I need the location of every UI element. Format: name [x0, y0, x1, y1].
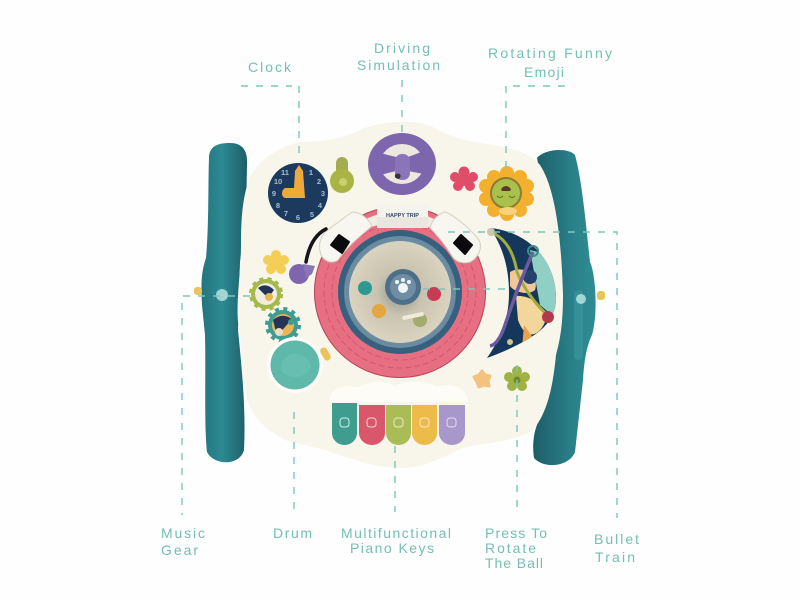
label: music gear: [161, 525, 205, 558]
label: driving simulation: Driving: [374, 40, 430, 56]
leader: piano keys: [394, 446, 396, 512]
yellow star button: [263, 250, 289, 274]
label: press to rotate the ball: The Ball: [485, 555, 543, 571]
white track pods: [320, 211, 480, 263]
clock: 11: [281, 168, 289, 177]
happy trip sign: [377, 203, 428, 228]
leader: drum: [293, 412, 295, 515]
label: bullet train: Train: [595, 549, 635, 565]
clock: 2: [317, 177, 321, 186]
clock: 9: [272, 189, 276, 198]
label: music gear: Gear: [161, 542, 198, 558]
label: driving simulation: [357, 40, 440, 73]
clock: 3: [321, 189, 325, 198]
toy body: [238, 122, 563, 468]
piano cloud: [330, 382, 468, 402]
label: bullet train: Bullet: [594, 531, 639, 547]
label: multifunctional piano keys: Multifunctional: [341, 525, 451, 541]
label: rotating funny emoji: Emoji: [524, 64, 564, 80]
clock: 8: [276, 201, 280, 210]
yellow pill: [319, 346, 332, 362]
leader: driving simulation: [401, 80, 403, 136]
drum: [267, 337, 323, 393]
label: multifunctional piano keys: Piano Keys: [350, 540, 434, 556]
music gear one: [251, 279, 281, 309]
right wheel: [533, 150, 605, 465]
leader: rotating emoji: [506, 86, 565, 170]
center paw button: [385, 269, 421, 305]
leader: music gear: [182, 296, 250, 515]
bullet train crescent: [487, 228, 556, 358]
rotating emoji sun: [479, 166, 534, 221]
label: bullet train: [594, 531, 639, 565]
clock: 10: [274, 177, 282, 186]
pink flower: [450, 166, 478, 191]
green flower press button: [504, 366, 530, 391]
clock: 7: [284, 209, 288, 218]
left wheel: [194, 143, 247, 462]
label: multifunctional piano keys: [341, 525, 451, 556]
purple cherry lever: [289, 229, 326, 284]
leader: clock: [241, 86, 299, 155]
clock: 5: [310, 210, 314, 219]
leader: press to rotate the ball: [420, 289, 517, 515]
green knob: [330, 157, 354, 193]
clock: 1: [309, 168, 313, 177]
label: drum: Drum: [273, 525, 312, 541]
label: clock: Clock: [248, 59, 292, 75]
steering wheel: [368, 133, 436, 195]
leader: bullet train: [448, 232, 617, 518]
label: rotating funny emoji: [488, 45, 612, 80]
balls in dome: [358, 281, 441, 327]
label: press to rotate the ball: Press To: [485, 525, 547, 541]
music gear two: [267, 309, 299, 341]
label: press to rotate the ball: [485, 525, 547, 571]
label: press to rotate the ball: Rotate: [485, 540, 536, 556]
label: music gear: Music: [161, 525, 205, 541]
clock: 4: [318, 201, 323, 210]
label: driving simulation: Simulation: [357, 57, 440, 73]
label: rotating funny emoji: Rotating Funny: [488, 45, 612, 61]
central ring: [314, 206, 486, 378]
happy trip sign: HAPPY TRIP: [386, 213, 419, 219]
piano keys: [332, 403, 465, 445]
clock: 6: [296, 213, 300, 222]
clock: [268, 163, 328, 223]
orange star button: [474, 371, 490, 387]
